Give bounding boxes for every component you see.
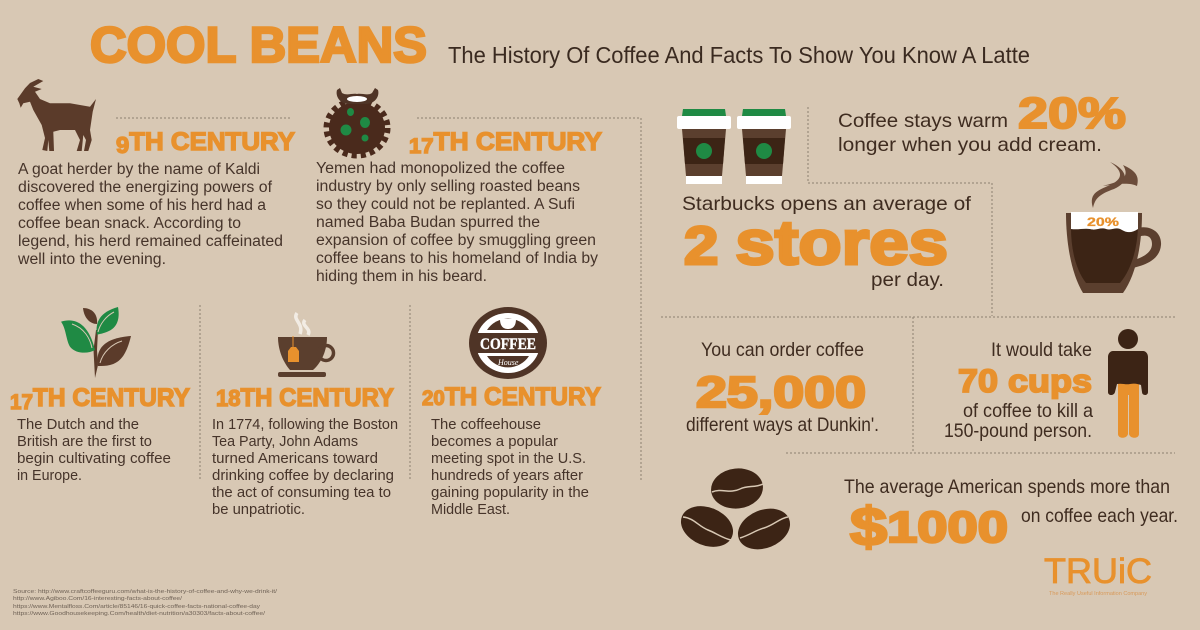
text: Yemen: expansion of coffee by smuggling green <box>316 232 596 249</box>
text: John Adams: turned Americans toward <box>212 451 378 467</box>
text: Yemen: so they could not be replanted. A Sufi <box>316 196 575 213</box>
panel: 20th century <box>422 307 601 518</box>
icon: coffee house badge <box>469 307 547 379</box>
text: Kaldi: legend, his herd remained caffeinated <box>18 233 283 250</box>
icon: mug with cream: 20% <box>1087 215 1119 229</box>
icon: coffee leaves <box>61 307 131 378</box>
text: to kill: of coffee to kill a <box>963 400 1093 422</box>
text: Yemen: industry by only selling roasted beans <box>316 178 580 195</box>
icon: tea cup <box>278 313 334 377</box>
icon: coffee cup 1 <box>677 109 731 184</box>
icon: coffee beans <box>675 466 796 557</box>
stat: 2 stores: 2 stores <box>684 209 948 278</box>
heading: 18th century: 18TH CENTURY <box>216 384 394 412</box>
sources <box>13 589 278 617</box>
icon: coffee cup 2 <box>737 109 791 184</box>
sources: Source: http://www.craftcoffeeguru.com/what-is-the-history-of-coffee-and-why-we-drink-it/ <box>13 589 278 595</box>
stat: 70 cups: 70 cups <box>958 363 1092 399</box>
sources: https://www.Goodhousekeeping.Com/health/diet-nutrition/a30303/facts-about-coffee/ <box>13 611 266 617</box>
text: coffeehouse: hundreds of years after <box>431 468 583 484</box>
text: it would take: It would take <box>991 339 1092 361</box>
text: Dutch: British are the first to <box>17 434 152 450</box>
text: John Adams: the act of consuming tea to <box>212 485 391 501</box>
text: order coffee: You can order coffee <box>701 339 864 361</box>
heading: 9th century: TH CENTURY <box>129 128 295 156</box>
panel: 70 cups <box>944 329 1148 442</box>
text: John Adams <box>212 417 398 518</box>
text: John Adams: Tea Party, John Adams <box>212 434 358 450</box>
title: COOL BEANS <box>90 17 427 73</box>
stat: 20%: 20% <box>1018 89 1126 138</box>
text: longer with cream: longer when you add cream. <box>838 134 1102 156</box>
text: Starbucks lead: Starbucks opens an average of <box>682 193 972 215</box>
text: Yemen <box>316 160 598 285</box>
text: coffeehouse <box>431 417 589 518</box>
icon: coffee house badge: COFFEE <box>480 336 536 353</box>
heading: 17th century: TH CENTURY <box>33 384 190 412</box>
text: Kaldi: coffee when some of his herd had a <box>18 197 266 214</box>
text: coffeehouse: The coffeehouse <box>431 417 541 433</box>
panel: cream <box>838 89 1161 293</box>
icon: goat <box>17 79 96 151</box>
stat: $1000: 1000 <box>887 503 1008 552</box>
text: Dutch <box>17 417 171 484</box>
text: Dutch: in Europe. <box>17 468 82 484</box>
icon: beard <box>327 88 387 155</box>
sources: https://www.Mentalfloss.Com/article/85146/16-quick-coffee-facts-national-coffee-day <box>13 604 260 610</box>
subtitle: The History Of Coffee And Facts To Show You Know A Latte <box>448 42 1030 68</box>
panel: 17th century Europe <box>10 307 190 484</box>
stat: 25,000: 25,000 <box>696 368 866 417</box>
text: different ways: different ways at Dunkin'. <box>686 414 879 436</box>
text: coffeehouse: becomes a popular <box>431 434 558 450</box>
text: John Adams: In 1774, following the Boston <box>212 417 398 433</box>
text: Yemen: coffee beans to his homeland of India by <box>316 250 598 267</box>
heading: 17th century: 17 <box>10 391 33 414</box>
text: coffeehouse: Middle East. <box>431 502 510 518</box>
text: Yemen: hiding them in his beard. <box>316 268 487 285</box>
heading: 9th century: 9 <box>116 132 129 158</box>
text: Kaldi: well into the evening. <box>17 251 166 268</box>
text: coffee stays warm: Coffee stays warm <box>838 110 1008 132</box>
text: Yemen: Yemen had monopolized the coffee <box>316 160 565 177</box>
panel: Dunkin <box>686 339 879 436</box>
icon: person <box>1108 329 1148 438</box>
panel: $1000 <box>675 466 1178 557</box>
text: John Adams: drinking coffee by declaring <box>212 468 394 484</box>
heading: 17th century: TH CENTURY <box>434 128 602 156</box>
text: Yemen: named Baba Budan spurred the <box>316 214 540 231</box>
text: Kaldi: discovered the energizing powers of <box>18 179 273 196</box>
text: John Adams: be unpatriotic. <box>212 502 305 518</box>
text: Dutch: The Dutch and the <box>17 417 139 433</box>
text: 150-pound: 150-pound person. <box>944 420 1092 442</box>
text: Dutch: begin cultivating coffee <box>17 451 171 467</box>
heading: 17th century: 17 <box>409 135 434 158</box>
logo: TRUiC: TRUiC <box>1044 552 1152 591</box>
panel: 17th century Yemen <box>316 88 602 285</box>
text: Kaldi: coffee bean snack. According to <box>18 215 241 232</box>
text: on coffee: on coffee each year. <box>1021 505 1178 527</box>
text: Kaldi <box>17 161 283 268</box>
text: coffeehouse: meeting spot in the U.S. <box>431 451 586 467</box>
panel: Starbucks <box>677 109 972 291</box>
panel: 18th century <box>212 313 398 518</box>
logo: TRUiC: The Really Useful Information Company <box>1049 591 1148 597</box>
text: Kaldi: A goat herder by the name of Kaldi <box>18 161 260 178</box>
text: average American: The average American spends more than <box>844 476 1170 498</box>
sources: http://www.Agiboo.Com/16-interesting-facts-about-coffee/ <box>13 596 183 602</box>
heading: 20th century: 20TH CENTURY <box>422 383 601 411</box>
icon: mug with cream <box>1066 162 1161 293</box>
text: per day: per day. <box>871 269 944 291</box>
icon: coffee house badge: House <box>497 358 519 367</box>
text: coffeehouse: gaining popularity in the <box>431 485 589 501</box>
stat: $1000: $ <box>850 497 887 557</box>
panel: 9th century <box>17 79 295 268</box>
